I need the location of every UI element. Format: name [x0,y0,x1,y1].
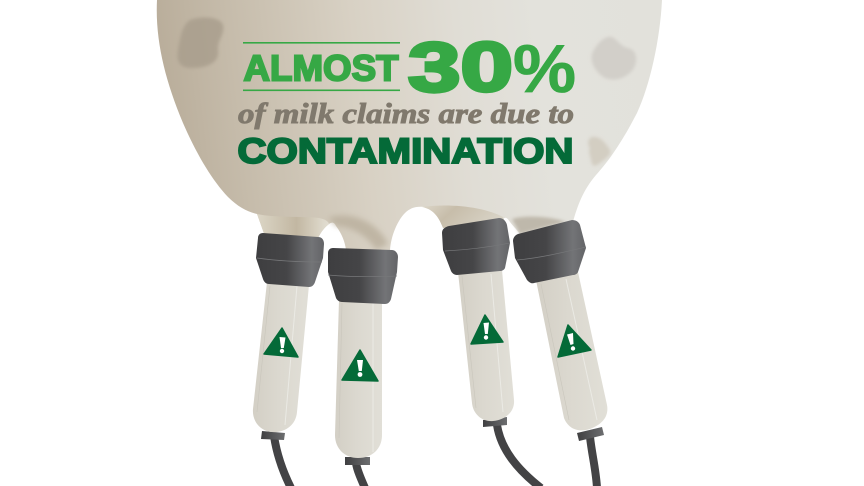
warning icon [471,315,503,344]
tube 2 [328,248,398,486]
30 percent [408,28,576,107]
teat 2 shadow [328,216,388,250]
collar [256,233,324,287]
udder spot: left [178,17,223,68]
warning icon [264,328,298,357]
rule above almost [243,42,400,44]
tube body [253,282,309,432]
collar [328,248,398,304]
teat 3 neck [422,205,505,228]
tube body [458,270,514,421]
rule below almost [243,90,400,91]
tube 1 [253,233,324,486]
udder spot: lower right [588,137,610,166]
connector [261,431,285,440]
30 percent: % [513,31,576,107]
cable [356,463,365,486]
connector [577,427,604,441]
udder spot: upper right [592,37,636,80]
contamination: CONTAMINATION [238,132,574,171]
cable [274,436,291,486]
collar [442,218,510,275]
almost: ALMOST [244,48,399,88]
tube body [536,272,607,430]
warning icon [558,325,591,357]
teat 4 shadow [512,217,566,234]
connector [345,457,370,465]
collar [513,220,586,283]
connector [483,417,507,427]
headline text [238,28,576,171]
udder body [157,0,662,252]
teat 1 neck [257,214,329,238]
30 percent: 30 [408,28,513,106]
tube 3 [442,218,541,486]
cable [590,437,597,486]
of milk claims are due to: of milk claims are due to [238,98,574,130]
tube body [335,300,382,458]
tube 4 [513,220,607,486]
cable [497,425,541,486]
warning icon [342,350,378,381]
